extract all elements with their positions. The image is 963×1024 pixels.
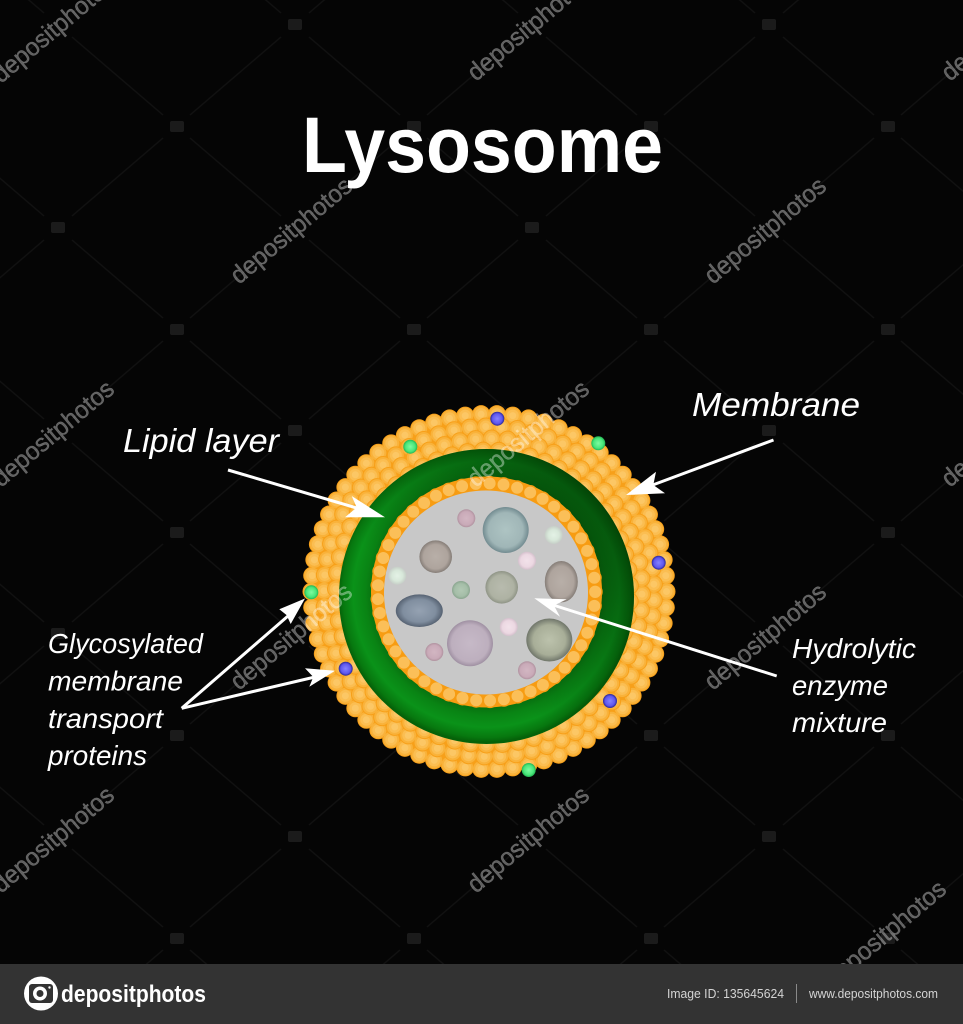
title: Lysosome: [302, 100, 663, 189]
enzyme: pink lower right: [518, 661, 536, 679]
label: hydrolytic enzyme mixture: [792, 633, 916, 738]
footer bar: [0, 964, 963, 1024]
image id: Image ID: 135645624: [667, 987, 784, 1001]
watermarks: depositphotos: [225, 172, 358, 290]
enzyme: blue oval: [396, 594, 443, 627]
watermarks: depositphotos: [699, 578, 832, 696]
enzyme: brown: [419, 540, 452, 573]
label: hydrolytic enzyme mixture: Hydrolytic: [792, 633, 916, 664]
watermarks: depositphotos: [225, 578, 358, 696]
watermarks: depositphotos: [819, 875, 952, 993]
enzyme: taupe oval: [545, 561, 578, 602]
label: hydrolytic enzyme mixture: enzyme: [792, 670, 888, 701]
green ring: [339, 449, 634, 744]
arrow: membrane: [626, 440, 774, 495]
transport proteins: [304, 412, 666, 777]
enzyme: pale green left: [388, 567, 406, 585]
hydrolytic enzyme mixture: [384, 490, 588, 694]
footer brand name: depositphotos: [61, 981, 206, 1008]
label: glycosylated membrane transport proteins: transport: [48, 703, 164, 734]
watermarks: depositphotos: [699, 172, 832, 290]
label: glycosylated membrane transport proteins: membrane: [48, 666, 183, 696]
arrows: glycosylated proteins: [182, 598, 335, 708]
watermarks: depositphotos: [462, 781, 595, 899]
enzyme: pale pink: [518, 552, 536, 570]
label: hydrolytic enzyme mixture: mixture: [792, 707, 887, 738]
enzyme: large purple: [447, 620, 493, 666]
lipid layer: inner orange ball ring: [371, 476, 602, 708]
enzyme: olive grey: [485, 571, 518, 604]
green protein: [591, 436, 605, 450]
website: www.depositphotos.com: [808, 987, 938, 1001]
membrane: outer orange ball layer: [312, 414, 666, 769]
label: membrane: Membrane: [692, 386, 860, 423]
enzyme: pale green: [545, 526, 563, 544]
arrow: hydrolytic enzyme: [534, 598, 777, 676]
enzyme: pale pink lower: [500, 618, 518, 636]
green protein: [304, 585, 318, 599]
enzyme: pink lower left: [425, 643, 443, 661]
enzyme: small pink: [457, 509, 475, 527]
enzyme: small green: [452, 581, 470, 599]
lysosome diagram: [304, 412, 666, 777]
enzyme: large olive: [526, 618, 572, 662]
label: glycosylated membrane transport proteins: Glycosylated: [48, 628, 204, 659]
watermarks: depositphotos: [462, 375, 595, 493]
blue protein: [490, 412, 504, 426]
enzyme: large teal: [483, 507, 529, 553]
label: glycosylated membrane transport proteins: proteins: [47, 740, 147, 771]
green protein: [403, 440, 417, 454]
label: lipid layer: Lipid layer: [123, 422, 281, 459]
blue protein: [603, 694, 617, 708]
label: glycosylated membrane transport proteins: [47, 628, 204, 771]
green protein: [522, 763, 536, 777]
arrow: lipid layer: [228, 470, 385, 517]
blue protein: [652, 556, 666, 570]
icon: depositphotos camera logo: [24, 976, 58, 1010]
blue protein: [339, 662, 353, 676]
